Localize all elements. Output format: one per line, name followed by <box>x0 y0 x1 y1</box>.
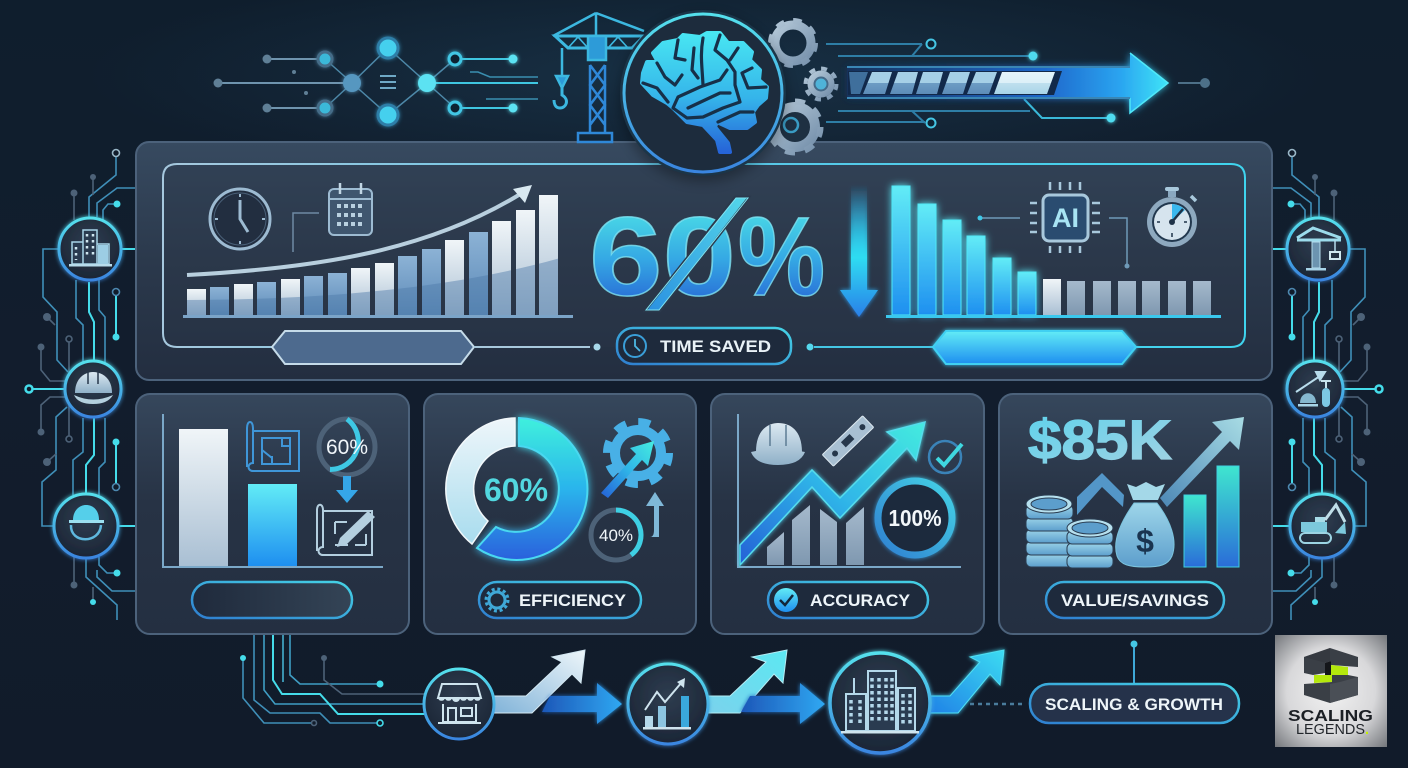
big statistic: 60%: % <box>738 194 825 319</box>
blue arrow two <box>741 683 825 724</box>
statistic: $85K: $85K <box>1028 408 1172 471</box>
light arrow one <box>490 650 585 713</box>
inner frame <box>163 164 1245 347</box>
ring: 100% <box>878 481 952 555</box>
panel: accuracy <box>711 394 984 634</box>
empty label pill <box>192 582 352 618</box>
icon: gears <box>770 21 836 152</box>
ring: 40%: 40% <box>599 526 633 545</box>
dotted connector <box>970 703 1024 705</box>
logo: Scaling Legends: LEGENDS. <box>1296 721 1369 738</box>
big statistic: 60% <box>589 194 825 319</box>
left bar chart: rising time <box>180 185 573 320</box>
pill: time saved: TIME SAVED <box>660 337 771 356</box>
small grey bars <box>767 505 864 565</box>
logo: Scaling Legends <box>1275 635 1387 747</box>
connector to scaling label <box>1130 640 1138 684</box>
icon: hard hat <box>751 423 805 465</box>
cyan arrow three <box>925 650 1004 713</box>
panel: value and savings <box>999 394 1272 634</box>
right bar chart: falling time <box>886 186 1221 318</box>
icon: money bag: $ <box>1136 523 1154 559</box>
ring: 40% <box>591 510 641 560</box>
axes <box>738 414 961 567</box>
down arrow <box>840 185 878 317</box>
pill: efficiency <box>479 582 641 618</box>
growth node: city buildings <box>830 653 930 753</box>
ring: 60% <box>319 419 375 503</box>
icon: brain <box>642 33 767 152</box>
icon: clock <box>210 189 270 249</box>
growth node: storefront <box>424 669 494 739</box>
rising arrow <box>1160 417 1244 507</box>
big statistic: 60%: 60 <box>589 194 736 319</box>
right empty hexagon label <box>933 331 1136 364</box>
icon node: office buildings <box>59 218 121 280</box>
icon: AI chip with connectors <box>978 182 1130 268</box>
icon node: tools and rising arrow <box>1287 361 1343 417</box>
pill: scaling and growth: SCALING & GROWTH <box>1045 695 1223 714</box>
icon node: tower crane <box>1287 218 1349 280</box>
icon: calendar with connector <box>293 183 372 252</box>
left empty hexagon label <box>272 331 474 364</box>
zigzag rising arrow <box>740 422 925 565</box>
pill: scaling and growth <box>1030 684 1239 723</box>
rising curve arrow <box>187 185 532 275</box>
left circuit traces <box>26 150 135 620</box>
long progress arrow <box>847 53 1168 113</box>
blue arrow one <box>542 683 622 724</box>
pill: accuracy <box>768 582 928 618</box>
donut chart 60% <box>446 418 587 560</box>
icon: blueprint <box>247 422 299 471</box>
icon: check ring <box>929 441 962 473</box>
ring: 100%: 100% <box>888 505 942 531</box>
icon: blueprint with ruler <box>317 505 375 555</box>
panel: plans comparison <box>136 394 409 634</box>
coin stacks <box>1026 495 1113 568</box>
pill: value/savings: VALUE/SAVINGS <box>1061 591 1209 610</box>
icon: tower crane <box>553 13 644 142</box>
main panel: time saved <box>136 142 1272 380</box>
light arrow two <box>705 650 787 713</box>
icon node: hard hat <box>65 361 121 417</box>
brain emblem circle <box>619 13 787 182</box>
icon: money bag <box>1116 482 1174 567</box>
logo mark <box>1304 648 1358 703</box>
growth path arrows <box>490 650 1024 724</box>
panel: efficiency <box>424 394 696 634</box>
icon: spirit level <box>822 416 874 466</box>
icon node: helmet with strap <box>54 494 118 558</box>
bottom label row <box>272 331 1136 364</box>
icon: gear with arrow <box>601 422 669 498</box>
comparison bars <box>163 414 383 567</box>
donut chart 60%: 60% <box>484 472 548 508</box>
pill: time saved <box>617 328 791 364</box>
ring: 60%: 60% <box>326 436 368 459</box>
icon: stopwatch <box>1147 187 1197 247</box>
logo: Scaling Legends: SCALING <box>1288 708 1373 725</box>
green to blue bars <box>1184 466 1239 567</box>
pill: accuracy: ACCURACY <box>810 591 911 610</box>
icon: AI chip with connectors: AI <box>1052 203 1079 233</box>
chevron <box>1077 473 1124 515</box>
bottom left circuit traces <box>240 635 424 726</box>
left network diagram <box>214 38 538 125</box>
small up arrow <box>646 492 664 537</box>
growth node: chart <box>628 664 708 744</box>
icon node: excavator <box>1290 494 1354 558</box>
pill: value/savings <box>1046 582 1224 618</box>
pill: efficiency: EFFICIENCY <box>519 591 627 610</box>
right top circuit lines <box>826 40 1210 128</box>
right circuit traces <box>1273 150 1382 620</box>
